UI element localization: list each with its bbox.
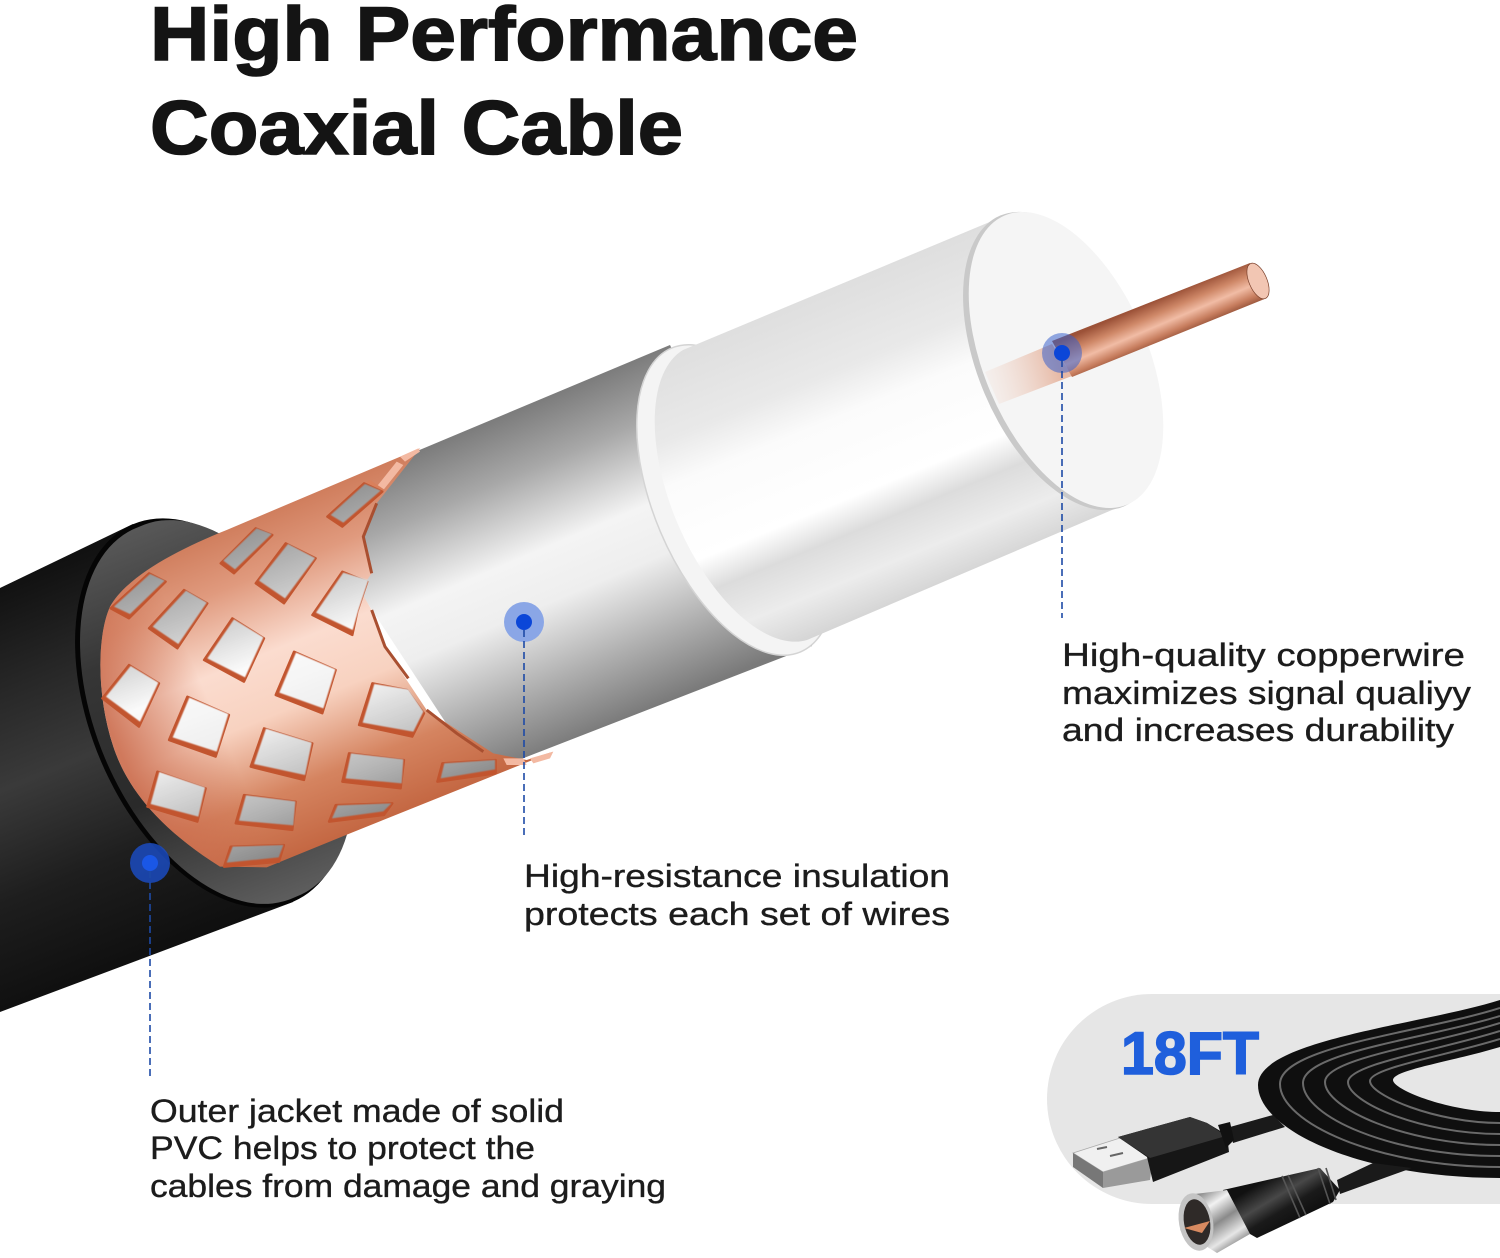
callout text: insulation: High-resistance insulation [524,858,950,894]
callout: outer jacket marker [130,843,170,1080]
panel: 18FT cable length [1047,994,1500,1254]
callout text: outer jacket: Outer jacket made of solid [150,1093,564,1129]
title: Coaxial Cable [150,86,683,171]
copper braided shield [100,448,553,867]
callout text: copper wire [1062,637,1471,748]
F connector [1174,1163,1412,1254]
callout: copper wire marker [1042,333,1082,618]
coiled black cable [1258,1000,1500,1178]
panel background [1047,994,1500,1204]
callout text: copper wire: maximizes signal qualiyy [1062,675,1471,711]
callout text: copper wire: and increases durability [1062,712,1454,748]
callout text: outer jacket [150,1093,666,1204]
callout text: outer jacket: cables from damage and graying [150,1168,666,1204]
callout text: insulation [524,858,950,932]
silver insulation tube [300,345,812,775]
white dielectric sleeve [596,183,1203,684]
length label: 18FT [1121,1020,1259,1087]
illustration: coaxial cable cross-section [0,183,1274,1012]
callout text: copper wire: High-quality copperwire [1062,637,1465,673]
callout: insulation marker [504,602,544,838]
callout text: outer jacket: PVC helps to protect the [150,1130,535,1166]
USB plug [1073,1115,1285,1188]
title [150,0,858,171]
copper centre conductor [985,260,1274,404]
black outer jacket [0,477,405,1012]
callout text: insulation: protects each set of wires [524,896,950,932]
braid holes [102,483,496,867]
